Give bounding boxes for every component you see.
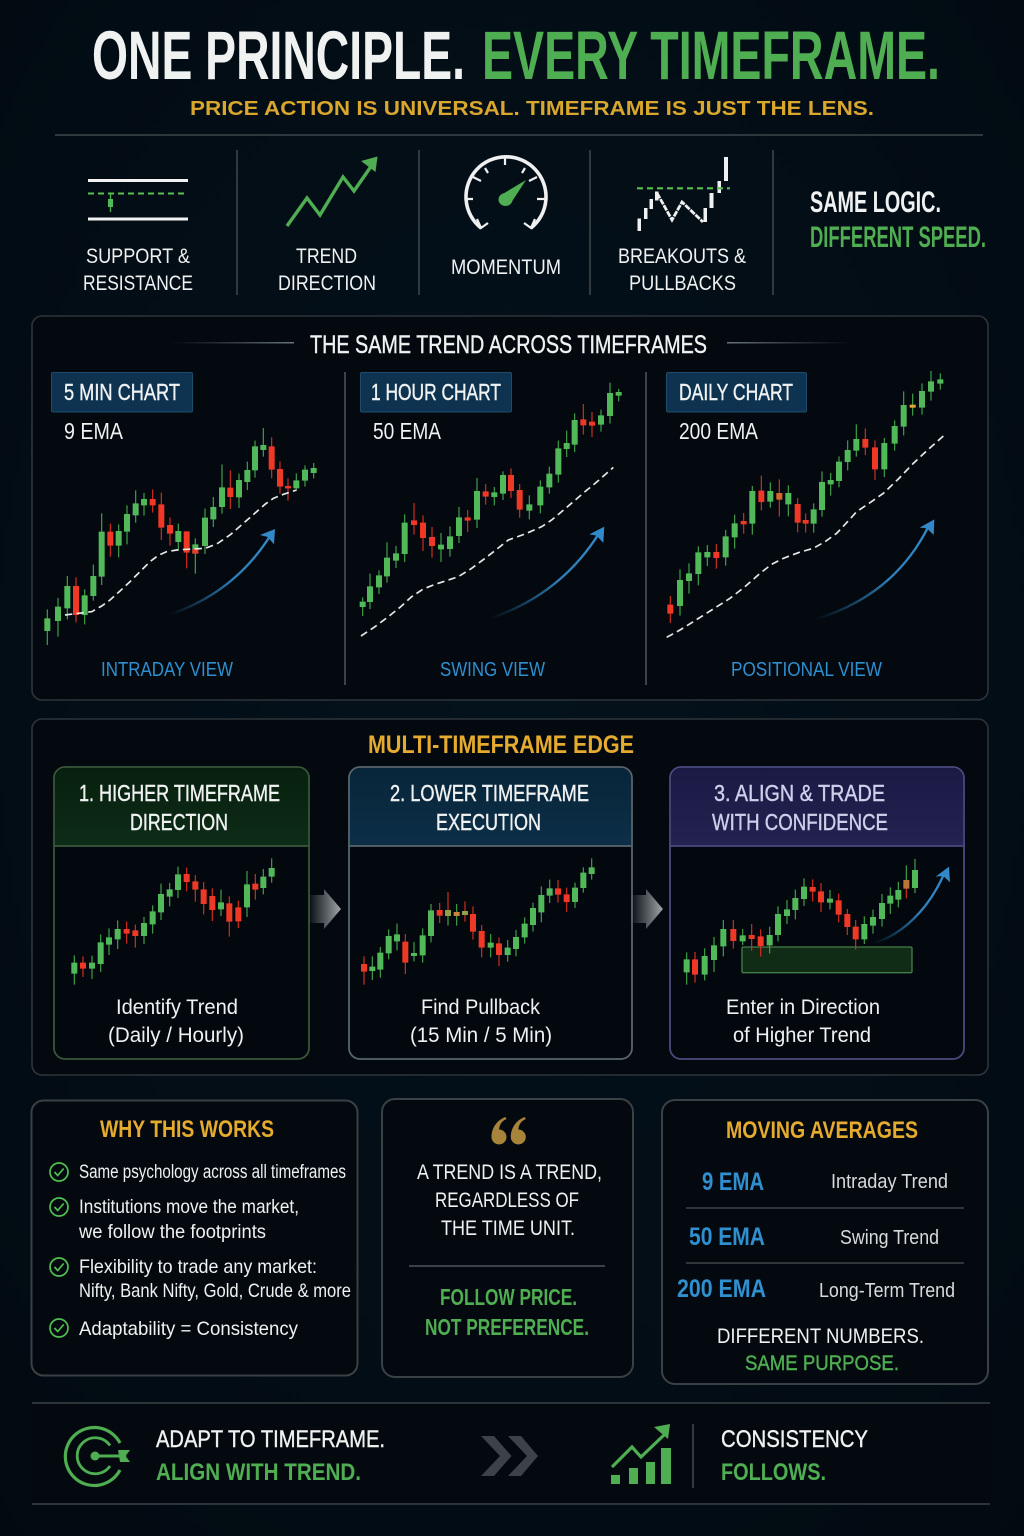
arrow: step 1 to step 2 [308, 889, 341, 929]
row: 200 EMA: Long-Term Trend [819, 1280, 955, 1302]
row: 9 EMA: 9 EMA [702, 1168, 764, 1196]
list item: same psychology: Same psychology across all timeframes [79, 1162, 346, 1183]
card: higher timeframe direction [54, 767, 309, 1059]
row: 50 EMA: 50 EMA [689, 1223, 765, 1251]
closing line: SAME PURPOSE. [745, 1352, 899, 1375]
heading: why this works: WHY THIS WORKS [100, 1116, 274, 1143]
subtitle: PRICE ACTION IS UNIVERSAL. TIMEFRAME IS JUST THE LENS. [190, 97, 874, 120]
panel: multi-timeframe edge [32, 719, 988, 1075]
label: breakouts and pullbacks [618, 245, 746, 295]
candlestick chart: daily [667, 371, 943, 637]
card text: find pullback: Find Pullback [421, 996, 540, 1019]
panel: moving averages [662, 1100, 988, 1384]
list item: flexibility: Flexibility to trade any market: [79, 1256, 317, 1278]
candlestick chart: higher timeframe [74, 858, 272, 985]
label: 50 EMA: 50 EMA [373, 418, 442, 444]
candlestick chart: 5 min [47, 428, 314, 645]
label: 200 EMA: 200 EMA [679, 418, 759, 444]
badge: daily chart: DAILY CHART [679, 379, 793, 405]
label: momentum: MOMENTUM [451, 256, 561, 279]
card heading: step 1 [79, 780, 280, 835]
title: ONE PRINCIPLE. [92, 17, 465, 94]
icon: double chevron [481, 1436, 538, 1476]
icon: momentum gauge [465, 157, 546, 228]
chart block: 5 min [47, 372, 314, 681]
label: support and resistance [83, 245, 193, 295]
icon: quote mark [492, 1117, 526, 1144]
heading: same trend: THE SAME TREND ACROSS TIMEFRAMES [310, 331, 707, 359]
label: breakouts and pullbacks: PULLBACKS [629, 272, 736, 295]
label: trend direction: DIRECTION [278, 272, 376, 295]
row: 200 EMA [677, 1275, 955, 1303]
card: lower timeframe execution [349, 767, 632, 1059]
list item: institutions [50, 1196, 299, 1243]
tagline: same logic, different speed: SAME LOGIC. [810, 186, 941, 219]
list item: flexibility: Nifty, Bank Nifty, Gold, Crude & more [79, 1280, 351, 1302]
label: support and resistance: SUPPORT & [86, 245, 190, 268]
title [92, 17, 940, 94]
closing line: DIFFERENT NUMBERS. [717, 1325, 924, 1348]
footer text: adapt [156, 1426, 385, 1486]
label: breakouts and pullbacks: BREAKOUTS & [618, 245, 746, 268]
caption: intraday view: INTRADAY VIEW [101, 659, 233, 681]
closing line [717, 1325, 924, 1375]
concept strip [83, 150, 986, 295]
card heading: step 1: DIRECTION [130, 809, 228, 835]
label: trend direction [278, 245, 376, 295]
card heading: step 1: 1. HIGHER TIMEFRAME [79, 780, 280, 806]
quote conclusion: NOT PREFERENCE. [425, 1314, 589, 1340]
badge: 1 hour chart [360, 372, 512, 412]
footer text: consistency: FOLLOWS. [721, 1459, 826, 1486]
footer text: consistency [721, 1426, 868, 1486]
label: trend direction: TREND [296, 245, 357, 268]
label: support and resistance: RESISTANCE [83, 272, 193, 295]
card text: find pullback [410, 996, 552, 1047]
card text: identify trend: Identify Trend [116, 996, 238, 1019]
candlestick chart: aligned entry with demand zone [687, 859, 950, 985]
heading: multi-timeframe edge: MULTI-TIMEFRAME EDGE [368, 731, 634, 759]
quote conclusion: FOLLOW PRICE. [440, 1284, 577, 1310]
quote text: THE TIME UNIT. [441, 1217, 575, 1240]
heading: moving averages: MOVING AVERAGES [726, 1117, 918, 1144]
badge: 5 min chart: 5 MIN CHART [64, 379, 180, 405]
label: 9 EMA: 9 EMA [64, 418, 124, 444]
footer text: adapt: ALIGN WITH TREND. [156, 1459, 361, 1486]
panel: quote [382, 1099, 633, 1377]
card heading: step 3 [712, 780, 888, 835]
caption: swing view: SWING VIEW [440, 659, 545, 681]
quote text [417, 1161, 602, 1240]
icon: target [65, 1428, 130, 1485]
card text: enter in direction: of Higher Trend [733, 1024, 871, 1047]
badge: daily chart [666, 372, 806, 412]
card text: enter in direction [726, 996, 880, 1047]
arrow: step 2 to step 3 [630, 889, 663, 929]
card: align and trade [670, 767, 964, 1059]
row: 200 EMA: 200 EMA [677, 1275, 766, 1303]
quote conclusion [425, 1284, 589, 1340]
row: 9 EMA [702, 1168, 948, 1196]
panel: why this works [32, 1100, 358, 1376]
card heading: step 2 [390, 780, 589, 835]
icon: breakout and pullback [637, 157, 730, 231]
card text: find pullback: (15 Min / 5 Min) [410, 1024, 552, 1047]
icon: rising bars [611, 1424, 671, 1484]
footer text: adapt: ADAPT TO TIMEFRAME. [156, 1426, 385, 1453]
card text: identify trend: (Daily / Hourly) [108, 1024, 244, 1047]
icon: trend direction arrow [287, 156, 378, 226]
card text: enter in direction: Enter in Direction [726, 996, 880, 1019]
row: 50 EMA [689, 1223, 939, 1251]
footer band [32, 1403, 990, 1504]
row: 50 EMA: Swing Trend [840, 1227, 939, 1249]
chart block: 1 hour [360, 372, 619, 681]
row: 9 EMA: Intraday Trend [831, 1171, 948, 1193]
card heading: step 2: EXECUTION [436, 809, 541, 835]
badge: 5 min chart [52, 372, 192, 412]
list item: flexibility [50, 1256, 351, 1302]
card text: identify trend [108, 996, 244, 1047]
candlestick chart: lower timeframe [364, 858, 592, 985]
icon: support and resistance [88, 180, 188, 219]
footer text: consistency: CONSISTENCY [721, 1426, 868, 1453]
card heading: step 3: WITH CONFIDENCE [712, 809, 888, 835]
tagline: same logic, different speed [810, 186, 986, 254]
card heading: step 2: 2. LOWER TIMEFRAME [390, 780, 589, 806]
list item: institutions: we follow the footprints [78, 1221, 266, 1243]
quote text: A TREND IS A TREND, [417, 1161, 602, 1184]
list item: institutions: Institutions move the market, [79, 1196, 299, 1218]
chart block: daily [666, 371, 943, 681]
list item: adaptability: Adaptability = Consistency [79, 1318, 298, 1340]
caption: positional view: POSITIONAL VIEW [731, 659, 882, 681]
panel: the same trend across timeframes [32, 316, 988, 700]
quote text: REGARDLESS OF [435, 1189, 579, 1212]
candlestick chart: 1 hour [361, 383, 619, 636]
card heading: step 3: 3. ALIGN & TRADE [714, 780, 885, 806]
badge: 1 hour chart: 1 HOUR CHART [371, 379, 501, 405]
